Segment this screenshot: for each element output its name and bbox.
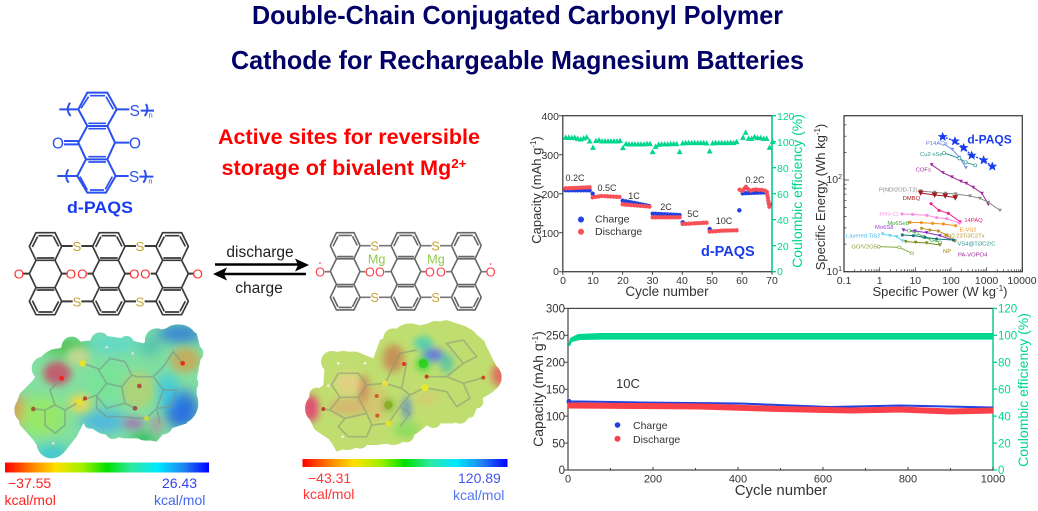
rate labels: 5C	[687, 209, 699, 219]
chart: long-term cycling	[530, 304, 1031, 499]
d-PAQS structural formula: O	[52, 135, 64, 152]
y axis ticks right: 100	[777, 137, 795, 149]
discharge and charge arrows: charge	[235, 280, 283, 297]
d-PAQS label: d-PAQS	[67, 198, 133, 217]
y axis ticks right: 60	[777, 189, 789, 201]
y axis ticks: 1	[838, 266, 842, 273]
y axis ticks right: 100	[998, 330, 1017, 342]
y axis ticks left: 0	[559, 465, 565, 477]
charge band	[568, 402, 993, 408]
d-PAQS tag: d-PAQS	[701, 244, 755, 260]
chart: Ragone plot	[813, 116, 1037, 299]
discharged molecule with Mg: S	[431, 291, 440, 305]
neutral d-PAQS molecule: O	[77, 267, 88, 282]
discharged molecule with Mg: Mg	[427, 252, 445, 266]
series labels: COFs	[916, 168, 931, 174]
y axis ticks right: 60	[998, 384, 1011, 396]
series labels: PHV-Cl	[879, 212, 898, 218]
y axis ticks right: 0	[998, 465, 1004, 477]
x axis ticks: 400	[729, 474, 747, 486]
scale labels right	[303, 470, 504, 503]
10C label: 10C	[616, 376, 640, 391]
axis titles	[529, 114, 805, 299]
discharge band	[568, 406, 993, 412]
x axis ticks	[837, 275, 1037, 287]
active sites callout: storage of bivalent Mg	[222, 157, 444, 180]
rate labels: 0.2C	[745, 175, 765, 185]
axis titles: Specific Power (W kg	[872, 284, 996, 299]
color scale left	[5, 462, 209, 472]
axis titles: )	[529, 136, 544, 141]
x axis ticks: 10	[909, 275, 921, 287]
y axis ticks left: 0	[553, 266, 559, 278]
x axis ticks: 1000	[975, 275, 998, 287]
axis titles: Specific Energy (Wh kg	[813, 135, 828, 270]
neutral d-PAQS molecule: S	[73, 239, 82, 254]
axis titles: Capacity (mAh g	[530, 343, 546, 447]
legend: Charge	[633, 420, 668, 432]
series labels: E-VS2	[960, 228, 977, 234]
chart: rate capability	[529, 111, 805, 299]
legend	[578, 214, 642, 238]
series labels: VS4@Ti3C2/C	[957, 241, 995, 247]
series labels: 14PAQ	[964, 218, 983, 224]
discharged molecule with Mg: O	[365, 265, 375, 279]
literature series	[879, 137, 1000, 253]
discharged molecule with Mg: O	[375, 265, 385, 279]
y axis ticks left: 200	[546, 358, 565, 370]
active sites callout: Active sites for reversible	[218, 126, 480, 149]
y axis ticks	[826, 174, 842, 278]
x axis ticks: 10000	[1007, 275, 1037, 287]
y axis ticks: 10	[826, 174, 838, 186]
x axis ticks: 10	[587, 275, 599, 287]
series labels: P(NDI2OD-T2)	[879, 188, 918, 194]
axis titles: -1	[530, 336, 540, 343]
color scale right	[302, 459, 508, 467]
x axis ticks: 0	[565, 474, 571, 486]
axis titles: Cycle number	[625, 284, 709, 299]
x axis ticks: 50	[706, 275, 718, 287]
d-PAQS structural formula: S	[130, 103, 140, 120]
x axis ticks: 0	[560, 275, 566, 287]
y axis ticks left: 50	[552, 438, 565, 450]
axis titles: )	[530, 331, 546, 336]
x axis ticks	[560, 275, 778, 287]
x axis ticks: 1	[877, 275, 883, 287]
y axis ticks left: 200	[541, 189, 559, 201]
x axis ticks: 200	[644, 474, 662, 486]
y axis ticks: 2	[838, 174, 842, 181]
d-PAQS structural formula: O	[129, 135, 141, 152]
rate labels: 2C	[660, 202, 672, 212]
active sites callout: 2+	[451, 156, 467, 171]
axis titles: )	[813, 124, 828, 128]
axis titles: Capacity (mAh g	[529, 148, 544, 244]
series labels: NP	[943, 249, 951, 255]
axis titles: Cycle number	[735, 482, 827, 499]
x axis ticks: 600	[814, 474, 832, 486]
y axis ticks: 10	[826, 266, 838, 278]
axis titles: Coulombic efficiency (%)	[789, 114, 805, 268]
y axis ticks left: 100	[546, 412, 565, 424]
neutral d-PAQS molecule: O	[192, 267, 203, 282]
discharge and charge arrows: discharge	[226, 244, 294, 261]
discharged molecule with Mg: O	[315, 265, 325, 279]
legend: Discharge	[633, 434, 680, 446]
y axis ticks right: 80	[777, 163, 789, 175]
series labels: GO/V2O5	[851, 244, 877, 250]
scale labels left: −37.55	[8, 475, 51, 491]
scale labels right: kcal/mol	[303, 486, 354, 502]
axis titles: Coulombic efficiency (%)	[1015, 313, 1031, 467]
scale labels right: 120.89	[458, 470, 501, 486]
y axis ticks right: 120	[998, 304, 1017, 316]
x axis ticks: 100	[942, 275, 960, 287]
series labels: Layered TiS2	[846, 234, 880, 240]
rate labels: 10C	[716, 216, 733, 226]
axis titles: -1	[813, 128, 822, 135]
neutral d-PAQS molecule: S	[73, 294, 82, 309]
y axis ticks left: 300	[541, 150, 559, 162]
series labels: Mo6Se8	[887, 221, 909, 227]
series labels: DMBQ	[903, 196, 921, 202]
axis titles: -1	[996, 284, 1004, 293]
d-PAQS structural formula: n	[149, 110, 153, 119]
axis titles	[530, 313, 1031, 499]
neutral d-PAQS molecule: S	[136, 239, 145, 254]
scale labels right: −43.31	[308, 470, 351, 486]
series labels: P14AQs	[926, 141, 948, 147]
discharged molecule with Mg: S	[431, 239, 440, 253]
y axis ticks right: 20	[998, 438, 1011, 450]
discharged molecule with Mg: S	[370, 291, 379, 305]
series labels	[846, 132, 1012, 258]
y axis ticks right: 0	[777, 266, 783, 278]
rate data series	[566, 132, 773, 232]
d-PAQS structural formula	[52, 93, 154, 193]
neutral d-PAQS molecule: O	[14, 267, 24, 282]
scale labels left: kcal/mol	[154, 492, 205, 508]
rate labels: 1C	[628, 191, 640, 201]
coulombic efficiency band	[568, 333, 993, 346]
x axis ticks: 800	[899, 474, 917, 486]
active sites callout	[218, 126, 480, 180]
x axis ticks: 20	[617, 275, 629, 287]
discharged molecule with Mg: S	[370, 239, 379, 253]
rate labels: 0.5C	[597, 183, 617, 193]
discharged molecule with Mg: O	[425, 265, 435, 279]
legend	[614, 420, 680, 446]
discharged molecule with Mg: Mg	[368, 252, 385, 266]
discharged molecule with Mg: O	[486, 265, 496, 279]
legend: Discharge	[595, 226, 642, 238]
discharged molecule with Mg	[315, 233, 496, 310]
neutral d-PAQS molecule	[14, 233, 203, 315]
y axis ticks left: 150	[546, 384, 565, 396]
d-PAQS structural formula: n	[148, 176, 152, 185]
d-PAQS structural formula: S	[129, 169, 139, 186]
scale labels left	[4, 475, 205, 508]
legend: Charge	[595, 214, 630, 226]
y axis ticks left	[546, 304, 565, 477]
series labels: Cu2-xSe	[920, 152, 943, 158]
title: Double-Chain Conjugated Carbonyl Polymer	[252, 0, 783, 30]
series labels: Mo6S8	[875, 225, 893, 231]
title	[231, 0, 804, 75]
y axis ticks left: 300	[546, 304, 565, 316]
x axis ticks: 40	[676, 275, 688, 287]
x axis ticks: 70	[766, 275, 778, 287]
discharged molecule with Mg: O	[436, 265, 446, 279]
rate labels	[565, 173, 765, 226]
x axis ticks	[565, 474, 1005, 486]
y axis ticks right: 20	[777, 241, 789, 253]
y axis ticks left	[541, 111, 559, 278]
scale labels right: kcal/mol	[453, 487, 504, 503]
electrostatic potential surface: Mg-d-PAQS	[305, 320, 502, 452]
axis titles: )	[1003, 284, 1008, 299]
neutral d-PAQS molecule: O	[140, 267, 151, 282]
y axis ticks left: 250	[546, 330, 565, 342]
neutral d-PAQS molecule: S	[136, 294, 145, 309]
series labels: Mg0.23Ti3C2Tx	[943, 234, 985, 240]
neutral d-PAQS molecule: O	[66, 267, 76, 282]
y axis ticks right: 80	[998, 358, 1011, 370]
y axis ticks right	[998, 304, 1017, 477]
electrostatic potential surface: d-PAQS	[14, 324, 204, 458]
y axis ticks right	[777, 111, 795, 278]
y axis ticks right: 40	[998, 412, 1011, 424]
y axis ticks right: 40	[777, 215, 789, 227]
x axis ticks: 0.1	[837, 275, 851, 287]
series labels: d-PAQS	[967, 132, 1012, 146]
x axis ticks: 1000	[981, 474, 1005, 486]
y axis ticks left: 400	[541, 111, 559, 123]
series labels: PA-VOPO4	[958, 252, 988, 258]
y axis ticks right: 120	[777, 111, 795, 123]
x axis ticks: 60	[736, 275, 748, 287]
neutral d-PAQS molecule: O	[129, 267, 140, 282]
discharge and charge arrows	[213, 244, 309, 297]
scale labels left: 26.43	[162, 475, 197, 491]
x axis ticks: 30	[647, 275, 658, 287]
axis titles	[813, 124, 1008, 299]
title: Cathode for Rechargeable Magnesium Batteries	[231, 45, 804, 75]
scale labels left: kcal/mol	[4, 492, 56, 508]
axis titles: -1	[529, 140, 538, 148]
rate labels: 0.2C	[565, 173, 585, 183]
y axis ticks left: 100	[541, 228, 559, 240]
